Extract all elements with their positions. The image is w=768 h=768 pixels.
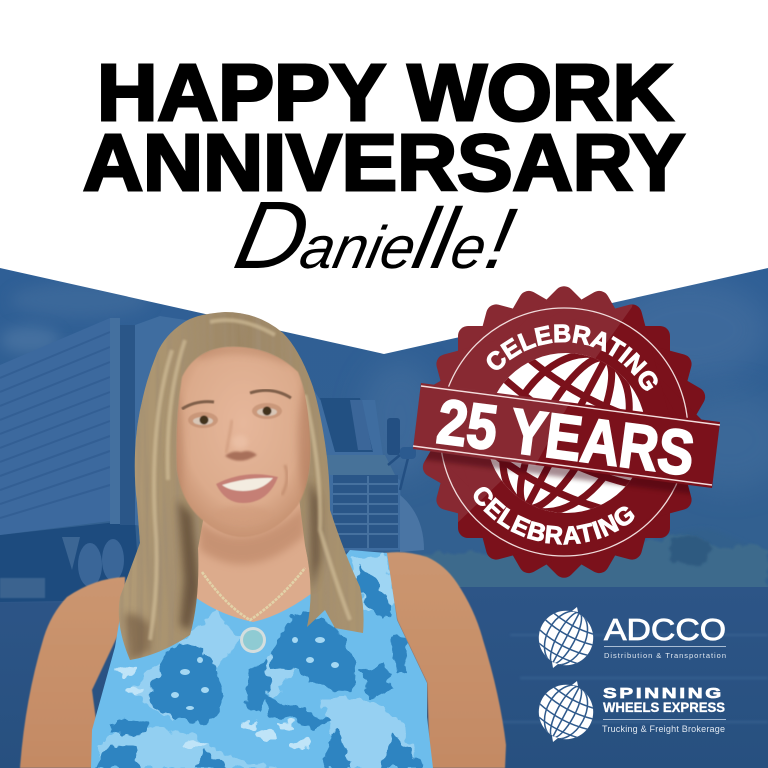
white chevron header panel — [0, 0, 768, 354]
logo: ADCCO: ADCCO — [604, 612, 726, 647]
ribbon shadow — [425, 451, 690, 495]
eyes — [188, 403, 282, 428]
necklace with pendant — [202, 568, 305, 653]
right arm and shoulder — [385, 552, 506, 768]
dress pattern: dark turtles and vines — [95, 565, 425, 768]
thin ring — [440, 308, 688, 556]
bottom curved label: CELEBRATING — [474, 487, 635, 545]
icon: Spinning Wheels globe — [527, 673, 605, 751]
left arm and shoulder — [20, 577, 125, 768]
gloss highlight — [423, 286, 632, 522]
icon: ADCCO globe — [527, 599, 605, 677]
sleeveless blue dress — [85, 545, 440, 768]
logo: Spinning Wheels Express — [527, 673, 726, 751]
title: ANNIVERSARY — [83, 118, 685, 207]
smile — [216, 474, 278, 503]
background photo: truck on road in blue duotone — [0, 260, 768, 768]
truck chassis — [0, 520, 140, 602]
title: HAPPY WORK — [97, 48, 673, 137]
logo: ADCCO — [527, 599, 726, 677]
25 years label: 25 YEARS — [433, 387, 698, 489]
neck and chest — [190, 490, 322, 630]
dark hair shadow by the neck — [178, 480, 320, 630]
logo: Spinning Wheels Express: WHEELS EXPRESS — [603, 699, 725, 715]
logo: ADCCO: Distribution & Transportation — [604, 651, 726, 660]
globe emblem — [452, 319, 680, 547]
scalloped seal base — [414, 282, 714, 582]
hair highlights — [150, 320, 350, 640]
logo: Spinning Wheels Express: Trucking & Freight Brokerage — [602, 724, 725, 734]
truck trailer — [0, 318, 118, 535]
top curved label: CELEBRATING — [486, 324, 658, 391]
long blonde hair — [119, 312, 364, 662]
dress pattern: light specks on turtle shells — [171, 637, 339, 710]
photo: smiling woman with blue floral dress — [20, 312, 506, 768]
ribbon banner — [413, 383, 720, 489]
truck cab — [135, 316, 402, 552]
nose — [225, 420, 257, 461]
anniversary badge — [412, 286, 720, 578]
eyebrows — [182, 390, 291, 409]
name in script: Danielle! — [227, 181, 525, 289]
title — [83, 48, 685, 207]
logo: Spinning Wheels Express: SPINNING — [603, 685, 724, 702]
dress pattern: light leaves — [100, 556, 420, 768]
face — [176, 346, 311, 537]
